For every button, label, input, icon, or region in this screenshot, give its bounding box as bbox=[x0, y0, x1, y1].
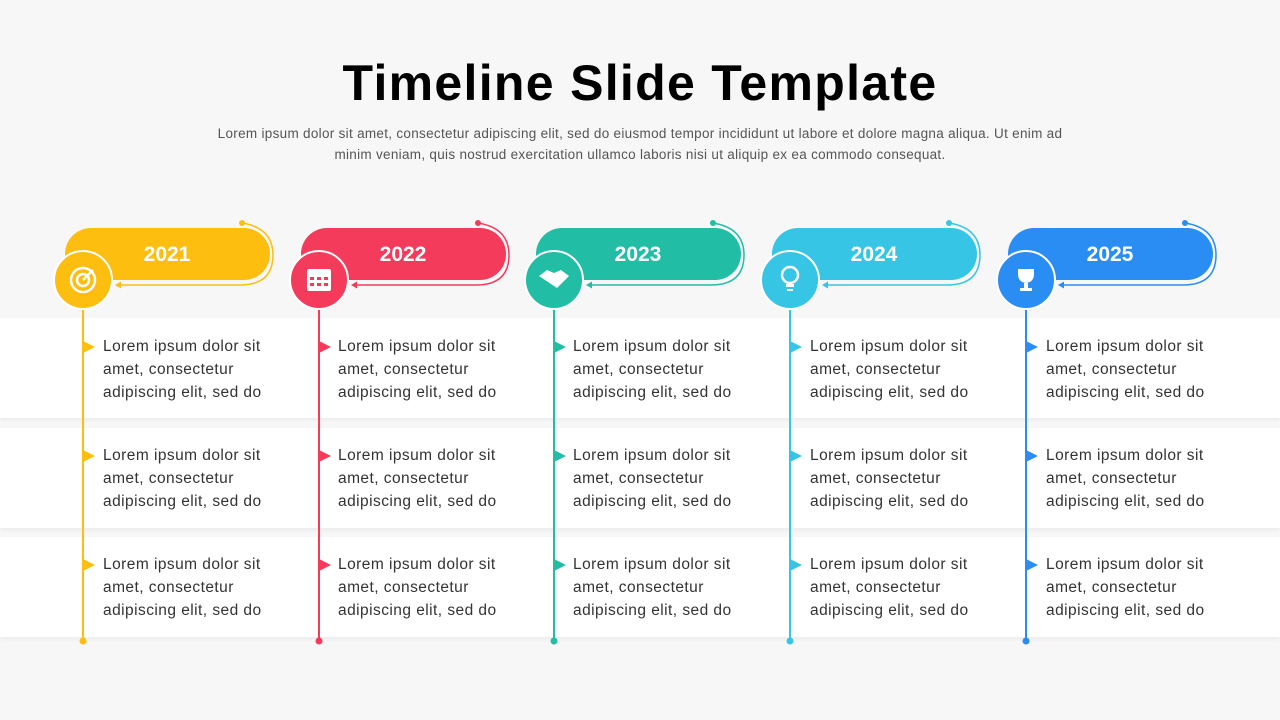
column 2021 bbox=[54, 220, 273, 644]
column 2024 bbox=[761, 220, 980, 644]
subtitle: Lorem ipsum dolor sit amet, consectetur adipiscing elit, sed do eiusmod tempor incididunt ut labore et dolore magna aliqua. Ut enim ad bbox=[218, 126, 1062, 141]
text blocks: Lorem ipsum dolor sit bbox=[103, 447, 261, 464]
column 2021: 2021 bbox=[144, 243, 191, 266]
row band 1 bbox=[0, 318, 1280, 418]
text blocks: Lorem ipsum dolor sit bbox=[810, 338, 968, 355]
row band 2 bbox=[0, 428, 1280, 528]
text blocks: Lorem ipsum dolor sit bbox=[573, 556, 731, 573]
column 2025: 2025 bbox=[1087, 243, 1134, 266]
text blocks: adipiscing elit, sed do bbox=[338, 602, 497, 619]
text blocks: amet, consectetur bbox=[338, 470, 469, 487]
text blocks: adipiscing elit, sed do bbox=[573, 384, 732, 401]
text blocks: adipiscing elit, sed do bbox=[103, 602, 262, 619]
text blocks: amet, consectetur bbox=[338, 361, 469, 378]
text blocks: adipiscing elit, sed do bbox=[573, 602, 732, 619]
text blocks: amet, consectetur bbox=[810, 361, 941, 378]
subtitle bbox=[218, 126, 1062, 162]
text blocks: adipiscing elit, sed do bbox=[1046, 602, 1205, 619]
row band 3 bbox=[0, 537, 1280, 637]
text blocks: Lorem ipsum dolor sit bbox=[338, 447, 496, 464]
text blocks: amet, consectetur bbox=[810, 579, 941, 596]
column 2023 bbox=[525, 220, 744, 644]
text blocks: Lorem ipsum dolor sit bbox=[810, 447, 968, 464]
text blocks: adipiscing elit, sed do bbox=[103, 384, 262, 401]
text blocks: adipiscing elit, sed do bbox=[573, 493, 732, 510]
column 2024: 2024 bbox=[851, 243, 898, 266]
column 2025 bbox=[997, 220, 1216, 644]
text blocks: adipiscing elit, sed do bbox=[103, 493, 262, 510]
subtitle: minim veniam, quis nostrud exercitation ullamco laboris nisi ut aliquip ex ea commodo consequat. bbox=[334, 147, 946, 162]
text blocks: adipiscing elit, sed do bbox=[810, 493, 969, 510]
text blocks: amet, consectetur bbox=[103, 361, 234, 378]
text blocks: Lorem ipsum dolor sit bbox=[810, 556, 968, 573]
text blocks: Lorem ipsum dolor sit bbox=[1046, 447, 1204, 464]
text blocks: adipiscing elit, sed do bbox=[1046, 384, 1205, 401]
column 2023: 2023 bbox=[615, 243, 661, 266]
text blocks: Lorem ipsum dolor sit bbox=[103, 338, 261, 355]
text blocks: adipiscing elit, sed do bbox=[810, 602, 969, 619]
text blocks: adipiscing elit, sed do bbox=[1046, 493, 1205, 510]
text blocks: amet, consectetur bbox=[1046, 361, 1177, 378]
title: Timeline Slide Template bbox=[343, 55, 937, 111]
text blocks: Lorem ipsum dolor sit bbox=[338, 556, 496, 573]
text blocks: amet, consectetur bbox=[573, 579, 704, 596]
text blocks: adipiscing elit, sed do bbox=[338, 384, 497, 401]
text blocks: Lorem ipsum dolor sit bbox=[573, 338, 731, 355]
text blocks: amet, consectetur bbox=[810, 470, 941, 487]
text blocks: adipiscing elit, sed do bbox=[810, 384, 969, 401]
text blocks: amet, consectetur bbox=[338, 579, 469, 596]
text blocks: Lorem ipsum dolor sit bbox=[1046, 556, 1204, 573]
column 2022 bbox=[290, 220, 509, 644]
text blocks: amet, consectetur bbox=[103, 470, 234, 487]
text blocks: Lorem ipsum dolor sit bbox=[338, 338, 496, 355]
text blocks: amet, consectetur bbox=[573, 361, 704, 378]
text blocks: amet, consectetur bbox=[103, 579, 234, 596]
text blocks: Lorem ipsum dolor sit bbox=[1046, 338, 1204, 355]
text blocks: amet, consectetur bbox=[573, 470, 704, 487]
text blocks: amet, consectetur bbox=[1046, 470, 1177, 487]
column 2022: 2022 bbox=[380, 243, 426, 266]
text blocks: Lorem ipsum dolor sit bbox=[103, 556, 261, 573]
text blocks: amet, consectetur bbox=[1046, 579, 1177, 596]
text blocks: adipiscing elit, sed do bbox=[338, 493, 497, 510]
text blocks: Lorem ipsum dolor sit bbox=[573, 447, 731, 464]
